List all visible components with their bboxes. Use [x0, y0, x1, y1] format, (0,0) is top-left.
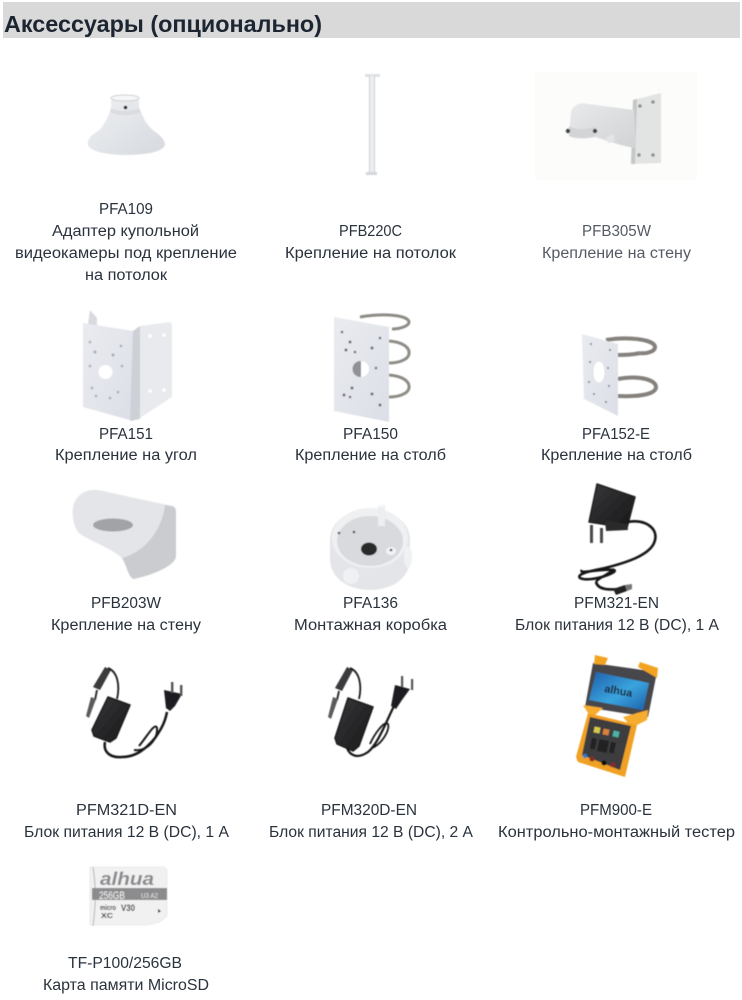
- panel: PFM321-EN: [515, 484, 720, 634]
- label text: Крепление на столб: [541, 447, 692, 464]
- label text: PFA109: [99, 201, 153, 218]
- label text: PFA150: [343, 426, 398, 443]
- label text: [15, 201, 237, 284]
- panel: PFB203W: [51, 490, 201, 634]
- panel: PFA136: [294, 503, 447, 634]
- label text: PFM321D-EN: [76, 802, 177, 819]
- label text: PFB203W: [91, 595, 161, 612]
- label text: Крепление на стену: [542, 245, 691, 262]
- label text: Крепление на угол: [55, 447, 197, 464]
- label text: Крепление на стену: [51, 617, 201, 634]
- label text: [285, 223, 456, 262]
- icon: microSD card: alhua: [100, 869, 154, 889]
- label text: Контрольно-монтажный тестер: [498, 824, 735, 841]
- panel: PFM900-E: [498, 655, 735, 841]
- label text: Блок питания 12 В (DC), 2 А: [269, 824, 474, 841]
- label text: PFA152-E: [582, 426, 650, 443]
- label text: [541, 426, 692, 464]
- label text: [269, 802, 474, 841]
- label text: [542, 223, 691, 262]
- icon: dome wall mount: [73, 490, 176, 579]
- label text: PFM900-E: [580, 802, 652, 819]
- label text: видеокамеры под крепление: [15, 245, 237, 262]
- icon: microSD card: micro: [100, 905, 116, 912]
- label text: на потолок: [85, 267, 167, 284]
- icon: wall bracket: [535, 72, 697, 180]
- label text: Крепление на потолок: [285, 245, 456, 262]
- icon: microSD card: V30: [121, 903, 135, 913]
- panel: PFB220C: [285, 74, 456, 262]
- panel: PFA109: [15, 95, 237, 284]
- label text: Монтажная коробка: [294, 617, 447, 634]
- panel: PFM320D-EN: [269, 667, 474, 841]
- label text: PFB220C: [339, 223, 402, 240]
- panel: PFM321D-EN: [24, 667, 230, 841]
- label text: PFA151: [99, 426, 153, 443]
- label text: PFM320D-EN: [321, 802, 417, 819]
- label text: [55, 426, 197, 464]
- icon: microSD card: U3 A2: [141, 893, 158, 900]
- label text: [24, 802, 230, 841]
- icon: junction box: [330, 503, 412, 590]
- icon: ceiling pole: [365, 74, 380, 175]
- label text: [295, 426, 446, 464]
- label text: PFA136: [343, 595, 398, 612]
- label text: Крепление на столб: [295, 447, 446, 464]
- label text: [51, 595, 201, 634]
- panel: PFA152-E: [541, 334, 692, 464]
- icon: corner mount: [83, 310, 172, 421]
- label text: PFB305W: [582, 223, 651, 240]
- label text: Блок питания 12 В (DC), 1 А: [24, 824, 230, 841]
- icon: wall power adapter with cable: [579, 484, 655, 595]
- label text: Адаптер купольной: [52, 223, 199, 240]
- label text: PFM321-EN: [574, 595, 659, 612]
- panel: PFB305W: [535, 72, 697, 262]
- label text: [515, 595, 720, 634]
- icon: microSD card: XC: [101, 913, 113, 920]
- panel: PFA150: [295, 315, 446, 464]
- icon: desktop power adapter 2 A: [328, 667, 413, 756]
- icon: small pole mount with two straps: [582, 334, 656, 416]
- label text: Блок питания 12 В (DC), 1 А: [515, 617, 720, 634]
- label text: TF-P100/256GB: [68, 955, 182, 972]
- label text: [43, 955, 209, 994]
- icon: desktop power adapter 1 A: [86, 667, 182, 757]
- panel: PFA151: [55, 310, 197, 464]
- label text: Карта памяти MicroSD: [43, 977, 209, 994]
- label text: [498, 802, 735, 841]
- title: Аксессуары (опционально): [4, 11, 322, 37]
- header bar: [3, 2, 740, 38]
- icon: handheld tester: [576, 655, 658, 777]
- panel: TF-P100/256GB: [43, 867, 209, 994]
- icon: handheld tester: alhua: [603, 683, 634, 700]
- icon: microSD card: [90, 867, 167, 926]
- icon: microSD card: 256GB: [99, 890, 125, 902]
- label text: [294, 595, 447, 634]
- icon: pole mount with three straps: [334, 315, 409, 422]
- icon: dome adapter: [88, 95, 165, 155]
